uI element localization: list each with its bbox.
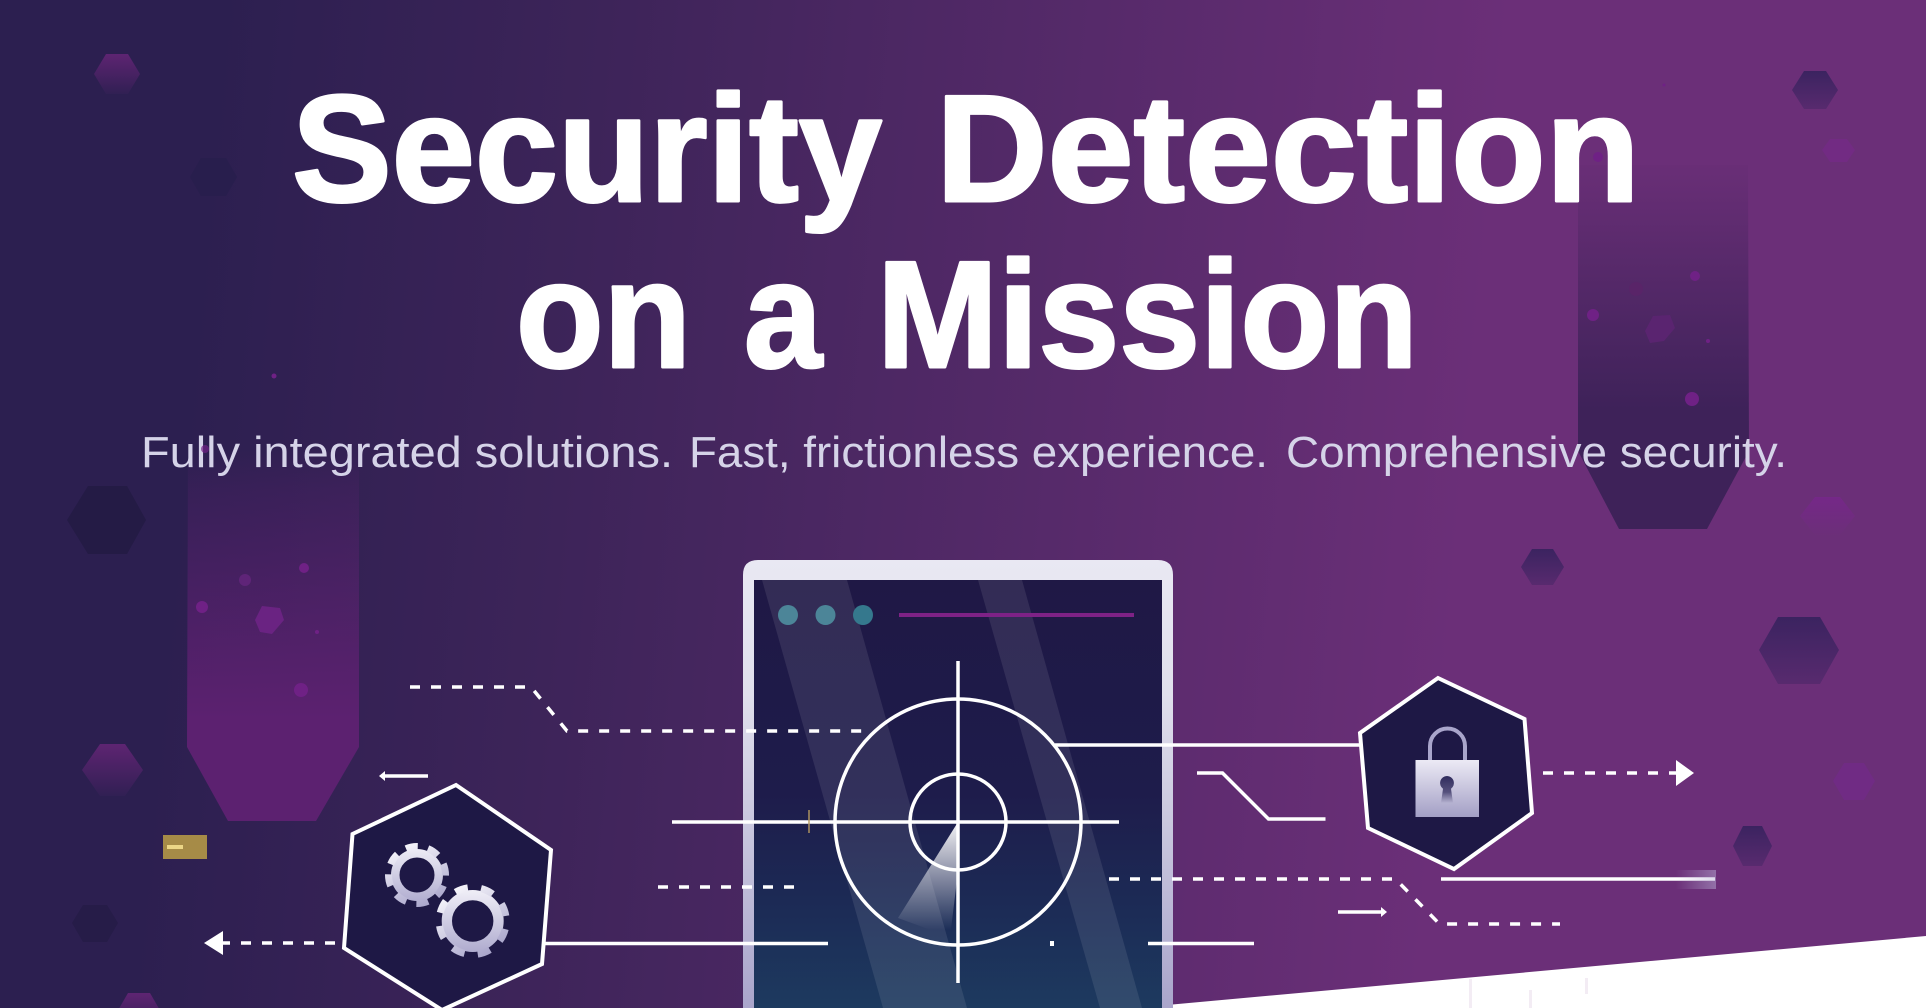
small arrow left [379,771,428,781]
window title bar line [899,613,1134,617]
monitor [743,560,1173,1008]
circuit lines [410,687,1716,946]
lock hexagon [1360,678,1532,869]
icon: padlock [1416,728,1479,817]
left light column [187,450,359,821]
subtitle: Comprehensive security. [1286,428,1787,477]
window dots [778,605,873,625]
panel: white lower section [1167,936,1926,1008]
subtitle: Fully integrated solutions. [141,428,673,477]
subtitle [141,428,1787,477]
screen light beams [762,580,1142,1008]
title: on [516,230,691,400]
right dark column [1578,165,1749,529]
small arrow right [1338,907,1387,917]
icon: large gear [427,875,519,967]
radar sweep [898,822,958,937]
title: Security [292,64,882,234]
title [292,64,1640,400]
title: a [744,230,823,400]
subtitle: Fast, frictionless experience. [689,428,1268,477]
title: Mission [877,230,1418,400]
dashed arrow right [1543,760,1694,786]
floating particles [196,84,1710,697]
icon: small gear [380,838,454,912]
crosshair target [672,661,1119,983]
gears hexagon [344,785,551,1008]
dashed arrow left [204,931,335,955]
gold tag [163,835,207,859]
title: Detection [936,64,1640,234]
